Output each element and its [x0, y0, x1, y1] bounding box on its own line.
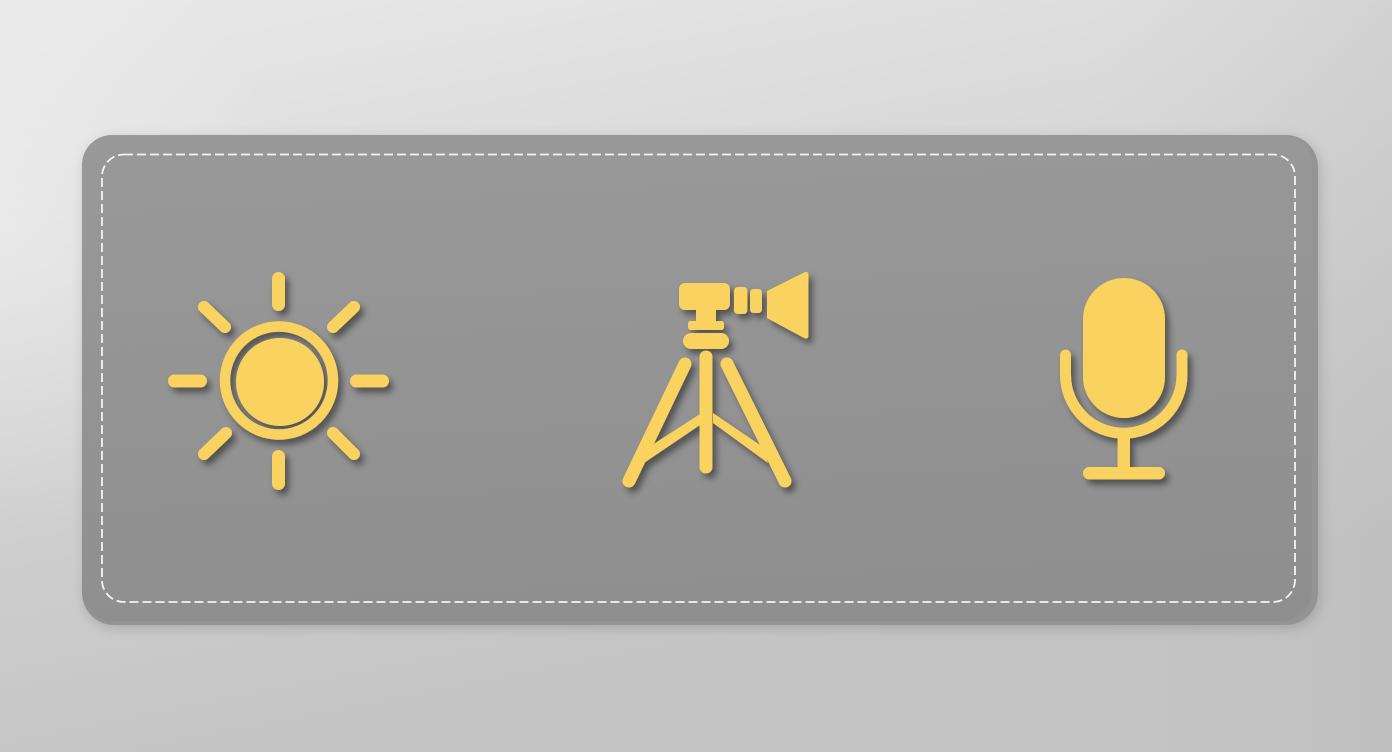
sun rays [174, 278, 382, 484]
icon: camera on tripod [629, 272, 808, 481]
microphone capsule [1083, 278, 1165, 418]
icon: sun [174, 278, 382, 484]
microphone cradle [1066, 355, 1182, 433]
sun diagonal rays [204, 307, 354, 454]
sun outer ring [225, 326, 333, 434]
camera mount flange [688, 321, 724, 330]
panel: stitched grey card [82, 135, 1318, 625]
microphone stem [1118, 435, 1130, 469]
tripod legs [629, 357, 785, 481]
lens cone [767, 272, 808, 339]
tripod braces [644, 413, 768, 463]
microphone base [1083, 467, 1165, 480]
sun inner disc [236, 338, 324, 426]
panel body [82, 135, 1312, 621]
camera head [679, 283, 730, 310]
panel rim [82, 135, 1318, 625]
tripod collar [683, 333, 729, 349]
lens ring small [750, 289, 762, 313]
icon: microphone [1066, 278, 1182, 480]
stitched dashed border [102, 154, 1295, 602]
lens ring large [734, 287, 748, 314]
camera mount neck [696, 306, 716, 324]
